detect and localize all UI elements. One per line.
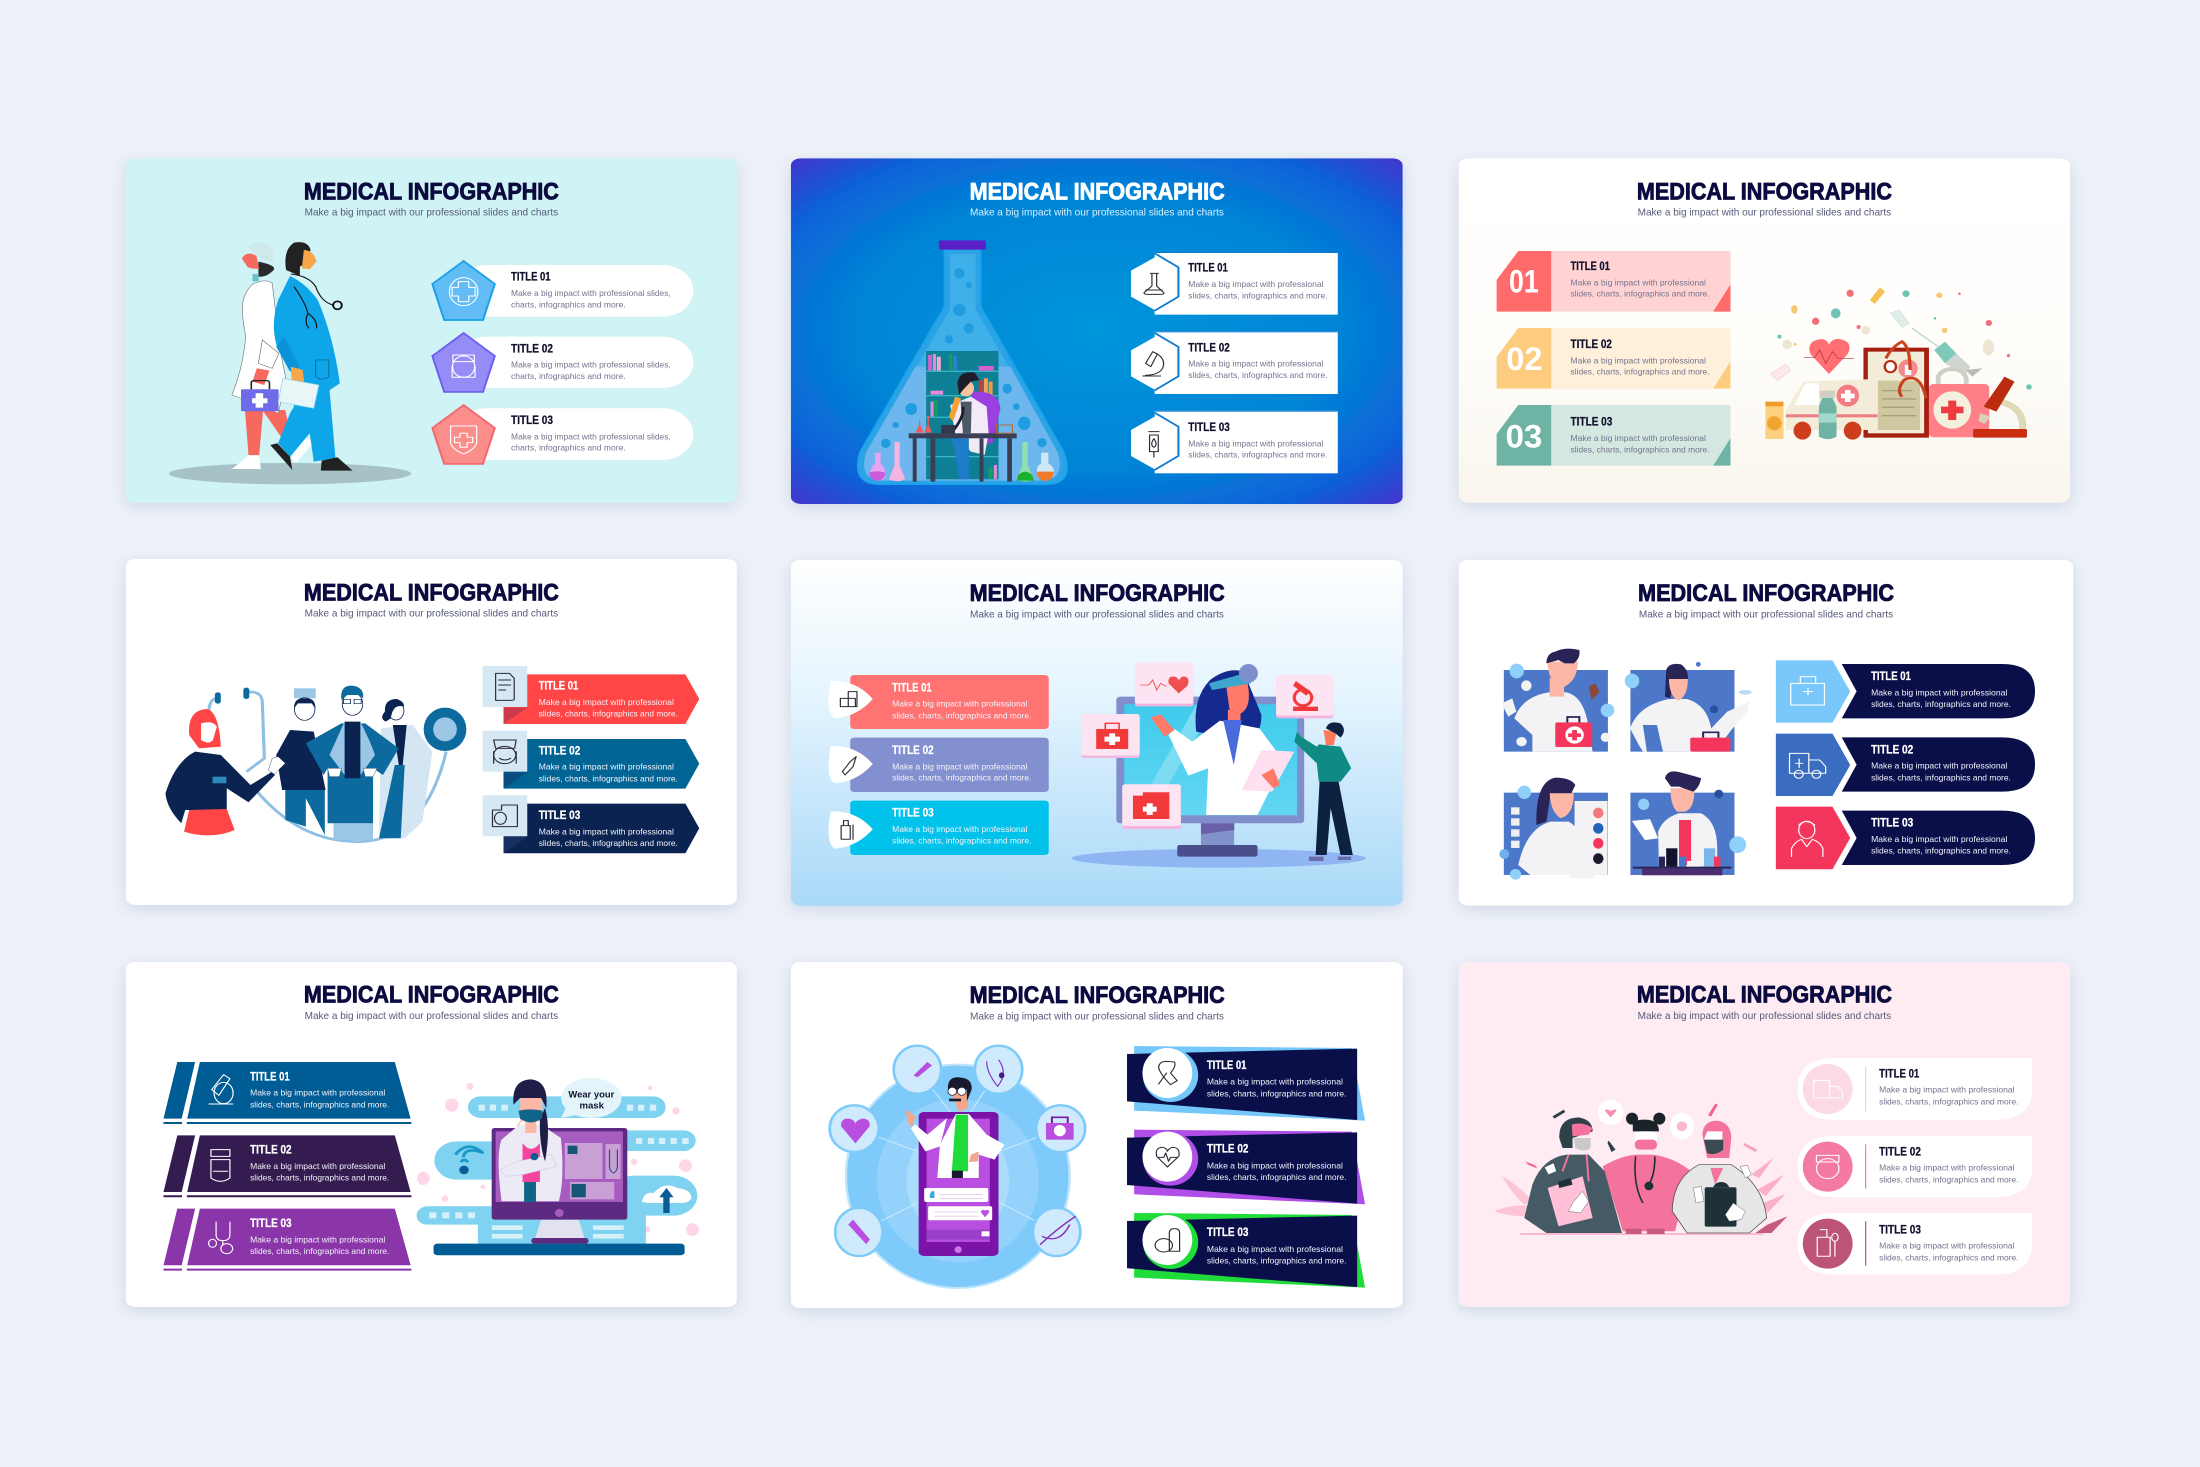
illustration: doctors and stethoscope: [165, 686, 466, 842]
subheading: Make a big impact with our professional slides and charts: [1638, 1011, 1891, 1022]
item 2: navy pill with blue arrow: Make a big impact with professional: [1871, 761, 2007, 771]
heading: MEDICAL INFOGRAPHIC: [970, 177, 1225, 205]
panel: slide 3 numbered list on cream: [1459, 158, 2070, 503]
item 2: amber numbered band: TITLE 02: [1571, 337, 1612, 351]
item 1: red arrow with icon tile: slides, charts, infographics and more.: [539, 709, 678, 719]
item 3: navy pill with red arrow: Make a big impact with professional: [1871, 835, 2007, 845]
item 1: navy banner with blue accent: TITLE 01: [1207, 1058, 1246, 1072]
illustration: doctor with first aid kit: [1501, 649, 1614, 752]
card background: [126, 962, 737, 1307]
item 3: navy pill with red arrow: slides, charts, infographics and more.: [1871, 846, 2011, 856]
item 2: dark purple trapezoid: Make a big impact with professional: [250, 1162, 385, 1172]
panel: slide 1 pentagons on mint: [126, 158, 737, 503]
item 2: dark purple trapezoid: TITLE 02: [250, 1143, 292, 1156]
illustration: doctor with chart: [1499, 778, 1608, 880]
item 1: white tab with pale pink circle: [1798, 1058, 2032, 1120]
item 2: periwinkle card with pick icon: TITLE 02: [892, 743, 934, 757]
panel: slide 6 four doctors: [1459, 560, 2073, 906]
item 1: pill with pentagon: Make a big impact with professional slides,: [511, 289, 671, 299]
card background: [1459, 962, 2070, 1307]
item 3: violet trapezoid: slides, charts, infographics and more.: [250, 1247, 389, 1257]
item 2: white tag with hexagon: slides, charts, infographics and more.: [1188, 371, 1327, 381]
heading: MEDICAL INFOGRAPHIC: [304, 981, 559, 1008]
illustration: doctor on laptop: [417, 1078, 699, 1255]
item 2: dark purple trapezoid: [163, 1135, 411, 1197]
item 1: red arrow with icon tile: [483, 666, 699, 724]
heading: MEDICAL INFOGRAPHIC: [970, 981, 1225, 1008]
item 3: cyan card with pick icon: slides, charts, infographics and more.: [892, 836, 1031, 846]
item 2: blue arrow with icon tile: Make a big impact with professional: [539, 762, 674, 772]
item 1: red numbered band: [1497, 251, 1730, 312]
item 1: navy banner with blue accent: Make a big impact with professional: [1207, 1077, 1343, 1087]
illustration: phone doctor with icon orbit: [830, 1046, 1085, 1288]
item 2: pill with pentagon: charts, infographics and more.: [511, 372, 626, 382]
item 3: pill with pentagon: Make a big impact with professional slides,: [511, 432, 671, 442]
item 3: navy arrow with icon tile: slides, charts, infographics and more.: [539, 839, 678, 849]
card background: [1459, 560, 2073, 906]
item 3: navy pill with red arrow: [1776, 807, 2035, 869]
item 3: pill with pentagon: charts, infographics and more.: [511, 443, 626, 453]
item 2: amber numbered band: slides, charts, infographics and more.: [1571, 367, 1710, 377]
item 2: navy pill with blue arrow: TITLE 02: [1871, 742, 1913, 756]
item 1: red numbered band: TITLE 01: [1571, 259, 1610, 273]
card background: [126, 158, 737, 503]
item 2: blue arrow with icon tile: [483, 731, 699, 789]
item 2: white tag with hexagon: Make a big impact with professional: [1188, 359, 1324, 369]
item 3: white tab with crimson circle: Make a big impact with professional: [1879, 1241, 2015, 1251]
card background: [126, 559, 737, 905]
heading: MEDICAL INFOGRAPHIC: [1637, 178, 1892, 205]
item 3: navy banner with green accent: [1127, 1213, 1365, 1288]
subheading: Make a big impact with our professional slides and charts: [970, 609, 1224, 620]
item 1: red arrow with icon tile: TITLE 01: [539, 679, 578, 692]
item 3: teal numbered band: slides, charts, infographics and more.: [1571, 445, 1710, 455]
item 3: navy arrow with icon tile: [483, 795, 699, 853]
item 2: navy banner with purple accent: Make a big impact with professional: [1207, 1161, 1343, 1171]
card background: [1459, 158, 2070, 503]
item 3: violet trapezoid: TITLE 03: [250, 1216, 292, 1230]
item 2: navy banner with purple accent: TITLE 02: [1207, 1142, 1248, 1155]
item 1: red numbered band: slides, charts, infographics and more.: [1571, 289, 1710, 299]
item 1: blue trapezoid: Make a big impact with professional: [250, 1088, 385, 1098]
item 3: violet trapezoid: [163, 1209, 411, 1271]
item 3: white tag with hexagon: TITLE 03: [1188, 420, 1230, 434]
item 2: amber numbered band: 02: [1506, 340, 1542, 377]
item 2: blue arrow with icon tile: TITLE 02: [539, 743, 580, 757]
item 1: red numbered band: 01: [1509, 263, 1539, 300]
panel: slide 5 telemedicine on pale blue: [791, 560, 1403, 906]
subheading: Make a big impact with our professional slides and charts: [305, 608, 558, 619]
illustration: nurse and doctor: [169, 242, 411, 484]
heading: MEDICAL INFOGRAPHIC: [304, 177, 559, 205]
item 3: violet trapezoid: Make a big impact with professional: [250, 1235, 385, 1245]
item 1: navy pill with light blue arrow: Make a big impact with professional: [1871, 688, 2007, 698]
heading: MEDICAL INFOGRAPHIC: [304, 578, 559, 606]
illustration: doctor on laptop: mask: [579, 1101, 604, 1111]
item 3: navy arrow with icon tile: Make a big impact with professional: [539, 827, 674, 837]
subheading: Make a big impact with our professional slides and charts: [305, 1011, 558, 1022]
item 1: pill with pentagon: charts, infographics and more.: [511, 300, 626, 310]
item 1: coral card with pick icon: slides, charts, infographics and more.: [892, 711, 1031, 721]
item 1: white tab with pale pink circle: slides, charts, infographics and more.: [1879, 1097, 2019, 1107]
item 1: blue trapezoid: TITLE 01: [250, 1069, 290, 1083]
panel: slide 8 mobile doctor: [791, 962, 1403, 1308]
item 2: navy banner with purple accent: slides, charts, infographics and more.: [1207, 1173, 1346, 1183]
item 2: pill with pentagon: Make a big impact with professional slides,: [511, 360, 671, 370]
illustration: medical kit objects: [1765, 287, 2032, 440]
item 3: white tag with hexagon: slides, charts, infographics and more.: [1188, 450, 1327, 460]
item 1: white tag with hexagon: [1131, 252, 1338, 315]
illustration: pharmacist with bottles: [1630, 771, 1746, 875]
item 3: pill with pentagon: [432, 405, 693, 464]
item 3: navy banner with green accent: TITLE 03: [1207, 1225, 1248, 1239]
item 2: white tab with pink circle: slides, charts, infographics and more.: [1879, 1175, 2019, 1185]
item 2: navy pill with blue arrow: [1776, 734, 2035, 796]
item 3: pill with pentagon: TITLE 03: [511, 413, 553, 427]
item 2: white tab with pink circle: Make a big impact with professional: [1879, 1163, 2015, 1173]
item 1: white tab with pale pink circle: Make a big impact with professional: [1879, 1085, 2015, 1095]
item 3: teal numbered band: TITLE 03: [1571, 415, 1612, 428]
item 2: periwinkle card with pick icon: Make a big impact with professional: [892, 762, 1027, 772]
panel: slide 2 flask on blue: [791, 158, 1403, 504]
item 3: white tab with crimson circle: slides, charts, infographics and more.: [1879, 1253, 2019, 1263]
item 1: blue trapezoid: slides, charts, infographics and more.: [250, 1100, 389, 1110]
item 3: navy pill with red arrow: TITLE 03: [1871, 816, 1913, 829]
heading: MEDICAL INFOGRAPHIC: [1638, 579, 1894, 606]
item 1: coral card with pick icon: Make a big impact with professional: [892, 699, 1027, 709]
item 1: red numbered band: Make a big impact with professional: [1571, 278, 1706, 288]
panel: slide 7 trapezoids with masked doctor: [126, 962, 737, 1307]
heading: MEDICAL INFOGRAPHIC: [1637, 981, 1892, 1008]
item 3: white tab with crimson circle: [1798, 1213, 2032, 1275]
item 1: navy banner with blue accent: [1127, 1046, 1365, 1121]
item 2: white tag with hexagon: [1131, 331, 1338, 394]
item 1: white tag with hexagon: slides, charts, infographics and more.: [1188, 291, 1327, 301]
item 3: cyan card with pick icon: Make a big impact with professional: [892, 825, 1027, 835]
item 2: pill with pentagon: [432, 333, 693, 392]
item 2: periwinkle card with pick icon: slides, charts, infographics and more.: [892, 773, 1031, 783]
item 1: white tag with hexagon: Make a big impact with professional: [1188, 280, 1324, 290]
item 1: navy pill with light blue arrow: TITLE 01: [1871, 669, 1911, 683]
item 3: white tag with hexagon: Make a big impact with professional: [1188, 439, 1324, 449]
item 3: navy banner with green accent: Make a big impact with professional: [1207, 1245, 1343, 1255]
item 1: white tab with pale pink circle: TITLE 01: [1879, 1066, 1919, 1080]
subheading: Make a big impact with our professional slides and charts: [305, 207, 558, 218]
item 3: cyan card with pick icon: TITLE 03: [892, 806, 934, 819]
illustration: masked medical team: [1494, 1100, 1788, 1235]
panel: slide 4 medical team: [126, 559, 737, 905]
item 2: amber numbered band: Make a big impact with professional: [1571, 356, 1706, 366]
item 3: navy arrow with icon tile: TITLE 03: [539, 808, 580, 822]
item 3: white tab with crimson circle: TITLE 03: [1879, 1222, 1921, 1236]
item 1: white tag with hexagon: TITLE 01: [1188, 261, 1228, 274]
item 1: navy pill with light blue arrow: slides, charts, infographics and more.: [1871, 700, 2011, 710]
item 2: navy pill with blue arrow: slides, charts, infographics and more.: [1871, 773, 2011, 783]
illustration: doctor on laptop: Wear your: [568, 1090, 614, 1100]
item 1: coral card with pick icon: TITLE 01: [892, 680, 932, 694]
illustration: doctor presenting: [1625, 662, 1752, 752]
subheading: Make a big impact with our professional slides and charts: [970, 207, 1224, 218]
panel: slide 9 pink medical team: [1459, 962, 2070, 1307]
item 3: white tag with hexagon: [1131, 411, 1338, 473]
item 1: pill with pentagon: TITLE 01: [511, 270, 551, 283]
item 3: teal numbered band: Make a big impact with professional: [1571, 434, 1706, 444]
illustration: flask with scientist: [858, 240, 1067, 484]
item 1: pill with pentagon: [432, 261, 693, 320]
illustration: doctor in monitor: [1072, 663, 1366, 868]
item 2: dark purple trapezoid: slides, charts, infographics and more.: [250, 1173, 389, 1183]
item 3: teal numbered band: [1497, 405, 1730, 466]
subheading: Make a big impact with our professional slides and charts: [970, 1011, 1224, 1022]
heading: MEDICAL INFOGRAPHIC: [970, 579, 1225, 606]
card background: [791, 158, 1403, 504]
item 1: coral card with pick icon: [828, 675, 1049, 729]
item 3: navy banner with green accent: slides, charts, infographics and more.: [1207, 1256, 1346, 1266]
subheading: Make a big impact with our professional slides and charts: [1639, 609, 1893, 620]
item 2: blue arrow with icon tile: slides, charts, infographics and more.: [539, 774, 678, 784]
item 2: periwinkle card with pick icon: [828, 738, 1049, 792]
subheading: Make a big impact with our professional slides and charts: [1638, 207, 1891, 218]
item 3: cyan card with pick icon: [828, 801, 1049, 855]
item 2: white tab with pink circle: [1798, 1136, 2032, 1197]
item 1: red arrow with icon tile: Make a big impact with professional: [539, 698, 674, 708]
item 2: navy banner with purple accent: [1127, 1130, 1365, 1204]
item 3: teal numbered band: 03: [1505, 418, 1542, 455]
item 1: navy pill with light blue arrow: [1776, 660, 2035, 723]
item 2: amber numbered band: [1497, 328, 1730, 389]
item 2: white tab with pink circle: TITLE 02: [1879, 1144, 1921, 1158]
card background: [791, 560, 1403, 906]
card background: [791, 962, 1403, 1308]
item 1: navy banner with blue accent: slides, charts, infographics and more.: [1207, 1089, 1346, 1099]
item 2: white tag with hexagon: TITLE 02: [1188, 340, 1230, 354]
item 2: pill with pentagon: TITLE 02: [511, 341, 553, 355]
item 1: blue trapezoid: [163, 1062, 411, 1124]
